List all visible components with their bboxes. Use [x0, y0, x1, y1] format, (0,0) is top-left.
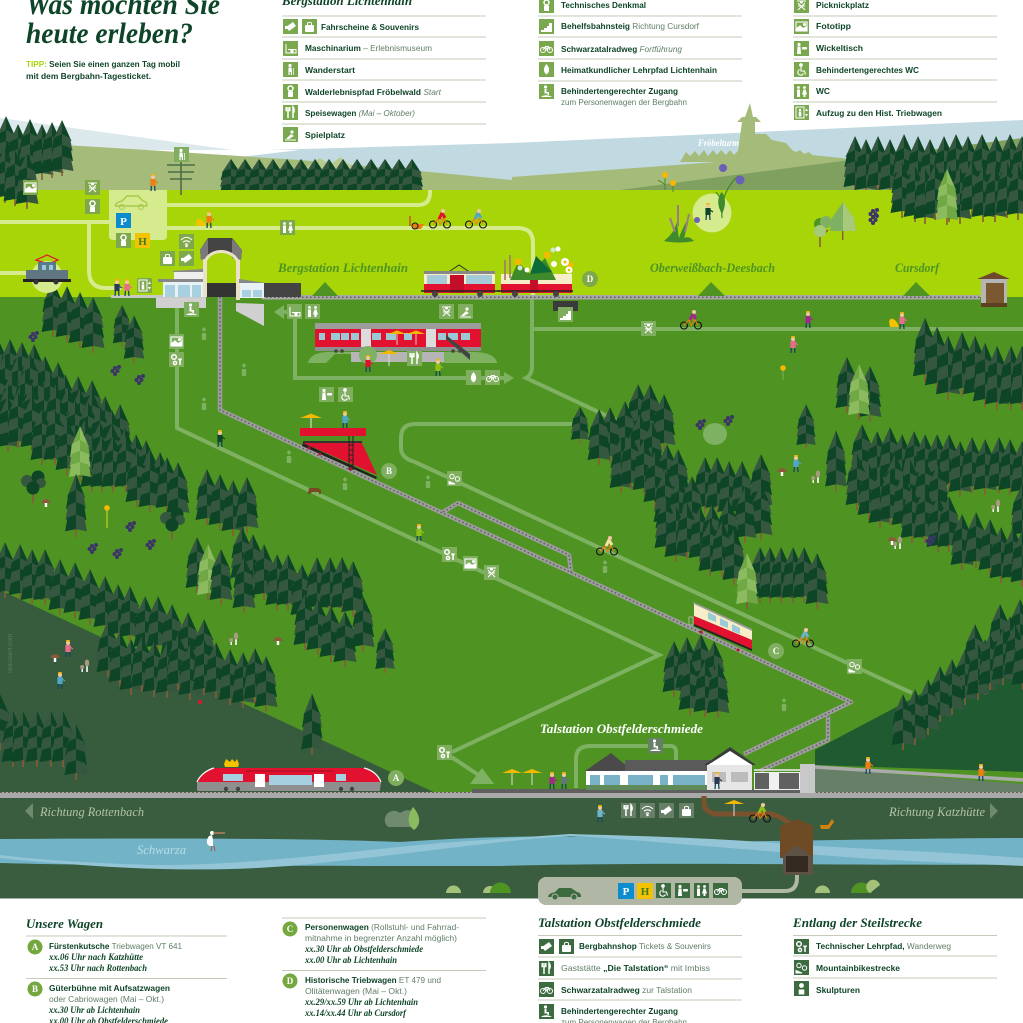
- forest: lower right: [892, 599, 1023, 750]
- label: Bergstation Lichtenhain: Bergstation Lichtenhain: [277, 261, 408, 275]
- legend: third column: Behindertengerechtes WC: [816, 65, 919, 75]
- bushes in valley: [385, 807, 880, 893]
- animals: [207, 488, 834, 851]
- trees near station: [42, 281, 144, 363]
- grass field: [0, 297, 1023, 797]
- legend: second column: zum Personenwagen der Bergbahn: [561, 97, 687, 107]
- label: Richtung Rottenbach: Richtung Rottenbach: [39, 805, 144, 819]
- circle marker C: C: [773, 646, 779, 656]
- legend: Entlang der Steilstrecke: Entlang der Steilstrecke: [792, 915, 922, 930]
- ranger circle in meadow: [692, 194, 732, 232]
- upper railway line: [262, 295, 980, 300]
- Güterbühne B on funicular: [300, 411, 377, 479]
- label: Richtung Katzhütte: Richtung Katzhütte: [888, 805, 985, 819]
- sky: [0, 118, 1023, 195]
- title: heute erleben?: [26, 17, 193, 50]
- station platforms triangles: [312, 282, 338, 296]
- circle marker A: A: [393, 773, 400, 783]
- label: Talstation Obstfelderschmiede: Talstation Obstfelderschmiede: [540, 722, 703, 736]
- red historic railcar train: [421, 265, 573, 297]
- meadow: [0, 190, 1023, 297]
- people, walkers: [57, 174, 986, 822]
- road lower right: [815, 768, 1023, 795]
- legend: Bergstation Lichtenhain: Speisewagen (Mai – Oktober): [305, 108, 415, 118]
- legend: Unsere Wagen A and B: B: [32, 984, 38, 994]
- forest: right upper: [796, 318, 1023, 492]
- parking: car, P and H: H: [138, 236, 147, 248]
- distant hills: [0, 130, 1023, 195]
- legend: Unsere Wagen A and B: xx.06 Uhr nach Katzhütte: [48, 952, 143, 962]
- tip text: TIPP: Seien Sie einen ganzen Tag mobil: [26, 59, 180, 69]
- legend: Wagen C and D: xx.14/xx.44 Uhr ab Cursdorf: [304, 1008, 407, 1018]
- legend: Bergstation Lichtenhain: [281, 0, 486, 142]
- map icon cluster: steep track: [437, 471, 862, 760]
- legend: Unsere Wagen A and B: xx.30 Uhr ab Lichtenhain: [48, 1005, 140, 1015]
- forest: right middle: [846, 424, 1023, 587]
- forest: meadow right: [890, 160, 1023, 225]
- Fröbelturm tower and treeline: [680, 103, 815, 162]
- legend: Unsere Wagen A and B: Unsere Wagen: [26, 916, 103, 931]
- legend: third column: Fototipp: [816, 21, 851, 31]
- Talstation building: [472, 747, 815, 793]
- legend: Entlang der Steilstrecke: [792, 915, 997, 996]
- legend: Bergstation Lichtenhain: Walderlebnispfad Fröbelwald Start: [305, 87, 442, 97]
- legend: second column: Behelfsbahnsteig Richtung Cursdorf: [561, 21, 700, 31]
- legend: Bergstation Lichtenhain: Maschinarium – Erlebnismuseum: [305, 43, 432, 53]
- sculpture markers: [202, 327, 786, 711]
- legend: second column: Behindertengerechter Zugang: [561, 86, 678, 96]
- legend: Wagen C and D: [282, 918, 486, 1018]
- legend: third column: Wickeltisch: [816, 43, 863, 53]
- forest: lower middle: [662, 634, 730, 718]
- Personenwagen C on funicular: [689, 602, 752, 652]
- legend: third column: Aufzug zu den Hist. Triebwagen: [816, 108, 942, 118]
- valley umbrella: [724, 800, 744, 816]
- legend: Bergstation Lichtenhain: Spielplatz: [305, 130, 345, 140]
- main railway line: [0, 792, 1023, 798]
- legend: third column: [793, 0, 997, 120]
- terminal shed Cursdorf: [977, 272, 1010, 307]
- legend: Unsere Wagen A and B: Güterbühne mit Aufsatzwagen: [49, 983, 170, 993]
- legend: second column: Heimatkundlicher Lehrpfad Lichtenhain: [561, 65, 717, 75]
- legend: Wagen C and D: Historische Triebwagen ET 479 und: [305, 975, 441, 985]
- bottom white strip: [0, 898, 1023, 1023]
- legend: Talstation Obstfelderschmiede: Talstation Obstfelderschmiede: [538, 915, 701, 930]
- forest: top left: [0, 116, 74, 209]
- legend: Unsere Wagen A and B: xx.53 Uhr nach Rottenbach: [48, 963, 147, 973]
- legend: third column: Picknickplatz: [816, 0, 869, 10]
- forest: diagonal band lower left: [0, 542, 278, 712]
- circle marker A: [388, 770, 404, 786]
- brown path and chalet: [704, 796, 813, 875]
- circle marker D: D: [587, 274, 594, 284]
- single tree in left clearing: [65, 474, 87, 537]
- legend: Wagen C and D: xx.29/xx.59 Uhr ab Lichtenhain: [304, 997, 418, 1007]
- tip text: mit dem Bergbahn-Tagesticket.: [26, 71, 151, 81]
- label: Cursdorf: Cursdorf: [895, 261, 941, 275]
- legend: Wagen C and D: Personenwagen (Rollstuhl- und Fahrrad-: [305, 922, 459, 932]
- parking pill: [538, 875, 797, 905]
- parking pad: [109, 190, 167, 240]
- parking pill: H: [641, 886, 650, 898]
- legend: Wagen C and D: Olitätenwagen (Mai – Okt.): [305, 986, 407, 996]
- lower valley band: [0, 797, 1023, 898]
- title: [26, 0, 220, 50]
- parking pill: P: [623, 886, 630, 898]
- dark hill lower left: [0, 590, 440, 795]
- VT 641 train A: [197, 759, 381, 791]
- label: Fröbelturm: Fröbelturm: [697, 138, 739, 148]
- Personenwagen restaurant: [308, 323, 497, 366]
- cyclists: [410, 209, 814, 822]
- forest: left: [0, 339, 190, 518]
- legend: Talstation Obstfelderschmiede: Behindertengerechter Zugang: [561, 1006, 678, 1016]
- legend: Wagen C and D: C: [287, 924, 293, 934]
- legend: Wagen C and D: xx.00 Uhr ab Lichtenhain: [304, 955, 397, 965]
- legend: Wagen C and D: mitnahme in begrenzter Anzahl möglich): [305, 933, 457, 943]
- legend: second column: Technisches Denkmal: [561, 0, 646, 10]
- meadow paths: [0, 190, 533, 297]
- legend: Wagen C and D: D: [287, 976, 294, 986]
- meadow deciduous trees: [814, 202, 856, 247]
- credit text: reduziert.com: [7, 634, 14, 673]
- legend: Bergstation Lichtenhain: Fahrscheine & Souvenirs: [321, 22, 419, 32]
- legend: Unsere Wagen A and B: oder Cabriowagen (Mai – Okt.): [49, 994, 164, 1004]
- tip text: [26, 59, 180, 81]
- horizon forests behind meadow: [220, 134, 1023, 197]
- parking: car, P and H: [115, 196, 150, 248]
- circle marker B: [381, 463, 397, 479]
- parking: car, P and H: P: [120, 216, 127, 228]
- trees on dark hill: [0, 693, 323, 780]
- forest: centre left: [186, 469, 395, 673]
- Bergstation building: [111, 238, 301, 326]
- historic locomotive: [23, 255, 71, 293]
- circle marker C: [768, 643, 784, 659]
- map icon cluster: Bergstation: [137, 234, 656, 402]
- label: Schwarza: Schwarza: [137, 843, 186, 857]
- legend: third column: WC: [816, 86, 830, 96]
- legend: Talstation Obstfelderschmiede: [538, 915, 742, 1023]
- grass walking paths: [177, 297, 1023, 788]
- map icon cluster: valley: [621, 803, 694, 818]
- dark hill lower right: [815, 640, 1023, 772]
- map icon cluster: top meadow: [23, 147, 295, 235]
- circle marker D: [582, 271, 598, 287]
- dark tunnel portal at steps: [553, 301, 578, 311]
- legend: Entlang der Steilstrecke: Skulpturen: [816, 985, 860, 995]
- legend: Wagen C and D: xx.30 Uhr ab Obstfelderschmiede: [304, 944, 423, 954]
- river Schwarza: [0, 834, 1023, 869]
- legend: Talstation Obstfelderschmiede: Bergbahnshop Tickets & Souvenirs: [579, 941, 711, 951]
- legend: second column: Schwarzatalradweg Fortführung: [561, 44, 682, 54]
- legend: Talstation Obstfelderschmiede: Schwarzatalradweg zur Talstation: [561, 985, 692, 995]
- forest: centre right: [571, 384, 828, 609]
- berries and mushrooms on grass: [28, 331, 1000, 704]
- funicular track: [220, 297, 851, 771]
- round deciduous trees: [21, 470, 185, 540]
- flowers on railcar: [505, 246, 574, 280]
- legend: Entlang der Steilstrecke: Mountainbikestrecke: [816, 963, 900, 973]
- legend: Unsere Wagen A and B: Fürstenkutsche Triebwagen VT 641: [49, 941, 182, 951]
- label: Oberweißbach-Deesbach: Oberweißbach-Deesbach: [650, 261, 775, 275]
- legend: Bergstation Lichtenhain: Wanderstart: [305, 65, 355, 75]
- circle marker B: B: [386, 466, 392, 476]
- legend: Talstation Obstfelderschmiede: Gaststätte „Die Talstation“ mit Imbiss: [561, 963, 710, 973]
- legend: Entlang der Steilstrecke: Technischer Lehrpfad, Wanderweg: [816, 941, 951, 951]
- flowers and herbs on meadow: [658, 164, 879, 242]
- ranger: [705, 203, 713, 220]
- legend: second column: [538, 0, 742, 107]
- legend: Unsere Wagen A and B: [26, 916, 227, 1023]
- legend: Unsere Wagen A and B: A: [32, 942, 39, 952]
